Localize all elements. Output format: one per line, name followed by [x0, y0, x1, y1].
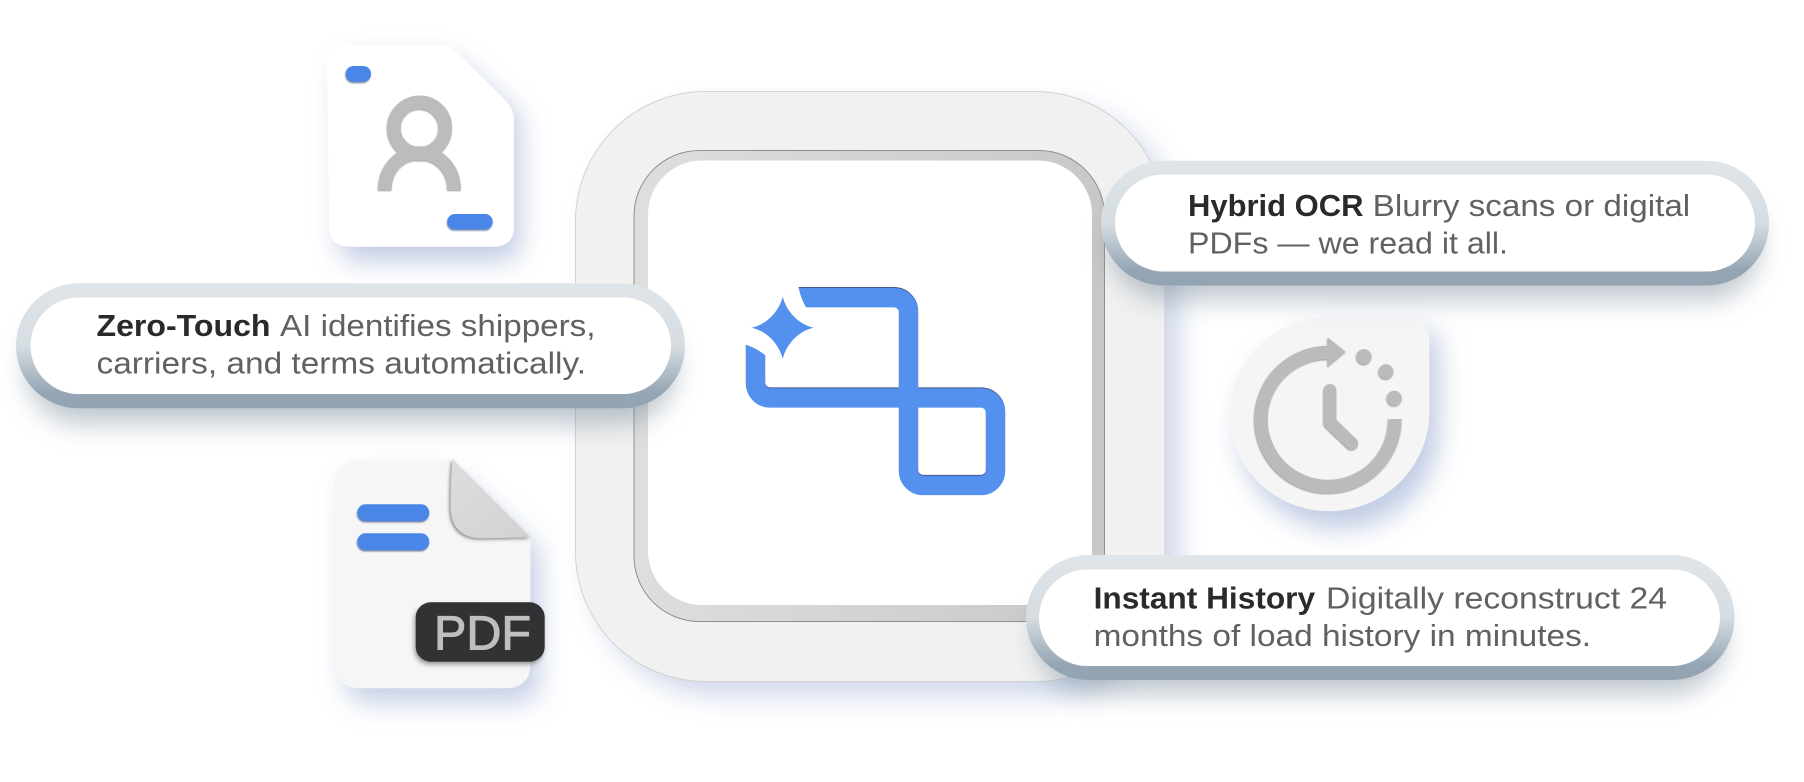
callout text: Instant History [1094, 581, 1316, 616]
callout: Instant History [1026, 555, 1734, 694]
callout text [1188, 188, 1690, 261]
callout text [96, 308, 596, 380]
blue tag top [346, 66, 371, 82]
blue line 1 [357, 504, 429, 521]
callout text: Hybrid OCR [1188, 188, 1364, 223]
blue line 2 [357, 533, 429, 550]
blue tag bottom [447, 214, 493, 229]
icon: person [385, 102, 454, 190]
callout: Zero-Touch [16, 283, 685, 424]
logo: blue ribbon with sparkle [740, 280, 996, 486]
PDF badge: PDF [434, 607, 531, 660]
callout text [1094, 581, 1667, 653]
callout: Hybrid OCR [1101, 161, 1769, 300]
icon card: person document [327, 45, 520, 261]
callout text: carriers, and terms automatically. [96, 346, 586, 380]
icon card: clock [1229, 318, 1439, 529]
progress dots [1356, 349, 1402, 406]
callout text: AI identifies shippers, [280, 308, 596, 343]
callout text: PDFs — we read it all. [1188, 226, 1508, 261]
PDF badge [416, 602, 545, 662]
clock hands [1330, 390, 1352, 443]
callout text: Digitally reconstruct 24 [1326, 581, 1667, 616]
central app frame [576, 92, 1180, 696]
page fold [451, 459, 531, 538]
callout text: Blurry scans or digital [1373, 188, 1690, 223]
callout text: Zero-Touch [96, 308, 270, 343]
icon: sparkle [751, 296, 814, 359]
callout text: months of load history in minutes. [1094, 618, 1591, 653]
clock arc and arrow [1261, 337, 1395, 486]
icon card: PDF document [334, 459, 545, 703]
